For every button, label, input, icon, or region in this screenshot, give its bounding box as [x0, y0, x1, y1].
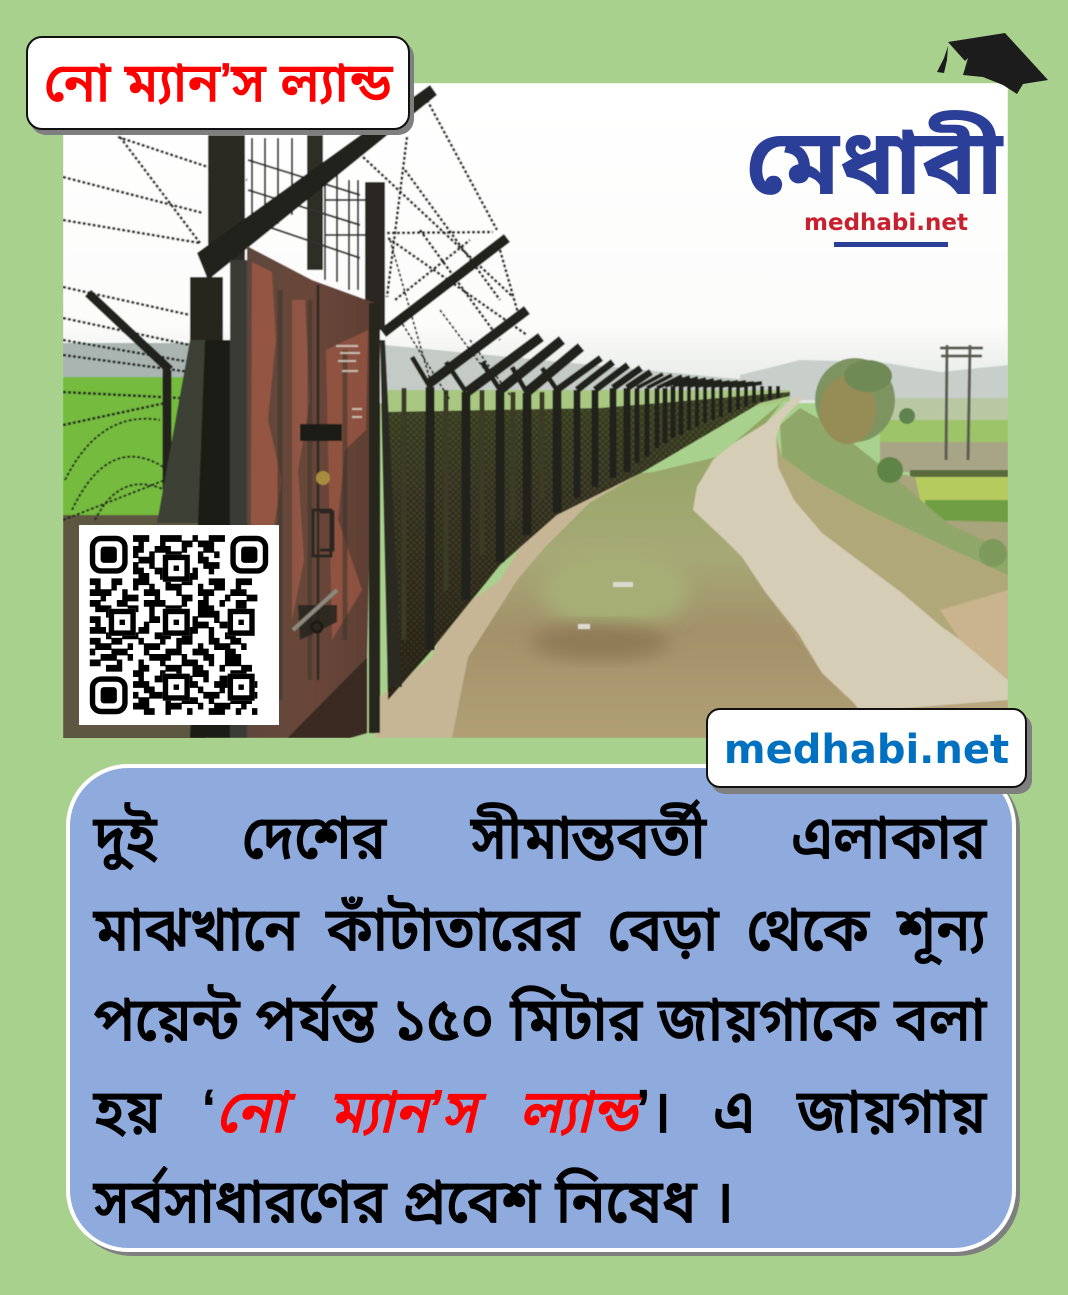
logo: graduation cap [937, 33, 1048, 94]
fence posts and arms [88, 238, 778, 650]
logo Bengali text: মেধাবী [745, 112, 1003, 214]
field behind fence [385, 390, 790, 430]
url badge: medhabi.net [724, 727, 1009, 773]
logo url: medhabi.net [804, 210, 968, 236]
title box [26, 36, 410, 130]
line 5: সর্বসাধারণের প্রবেশ নিষেধ । [94, 1168, 734, 1235]
logo underline [834, 242, 948, 247]
right embankment [760, 437, 1008, 738]
photo: border fence and road [63, 83, 1008, 738]
logo: medhabi wordmark [745, 110, 1004, 247]
distant haze [63, 343, 1008, 400]
grass verge [375, 500, 880, 738]
road [693, 397, 1008, 738]
gate [157, 85, 437, 738]
title box: নো ম্যান’স ল্যান্ড [44, 53, 392, 113]
sand path beside fence [375, 463, 645, 738]
barbed wire [63, 100, 527, 520]
definition panel [66, 764, 1016, 1252]
tree [815, 358, 915, 444]
line 3: পয়েন্ট পর্যন্ত ১৫০ মিটার জায়গাকে বলা [94, 986, 986, 1053]
stones [578, 582, 633, 629]
line 1: দুই দেশের সীমান্তবর্তী এলাকার [94, 804, 986, 871]
left field [63, 377, 203, 522]
fence mesh [385, 392, 790, 700]
line 2: মাঝখানে কাঁটাতারের বেড়া থেকে শূন্য [94, 896, 986, 963]
right fields [860, 398, 1008, 580]
url badge [706, 708, 1027, 788]
poles [940, 345, 983, 460]
rust patches [250, 262, 282, 690]
QR code [79, 525, 279, 725]
line 4: হয় ‘নো ম্যান’স ল্যান্ড’। এ জায়গায় [94, 1078, 986, 1145]
